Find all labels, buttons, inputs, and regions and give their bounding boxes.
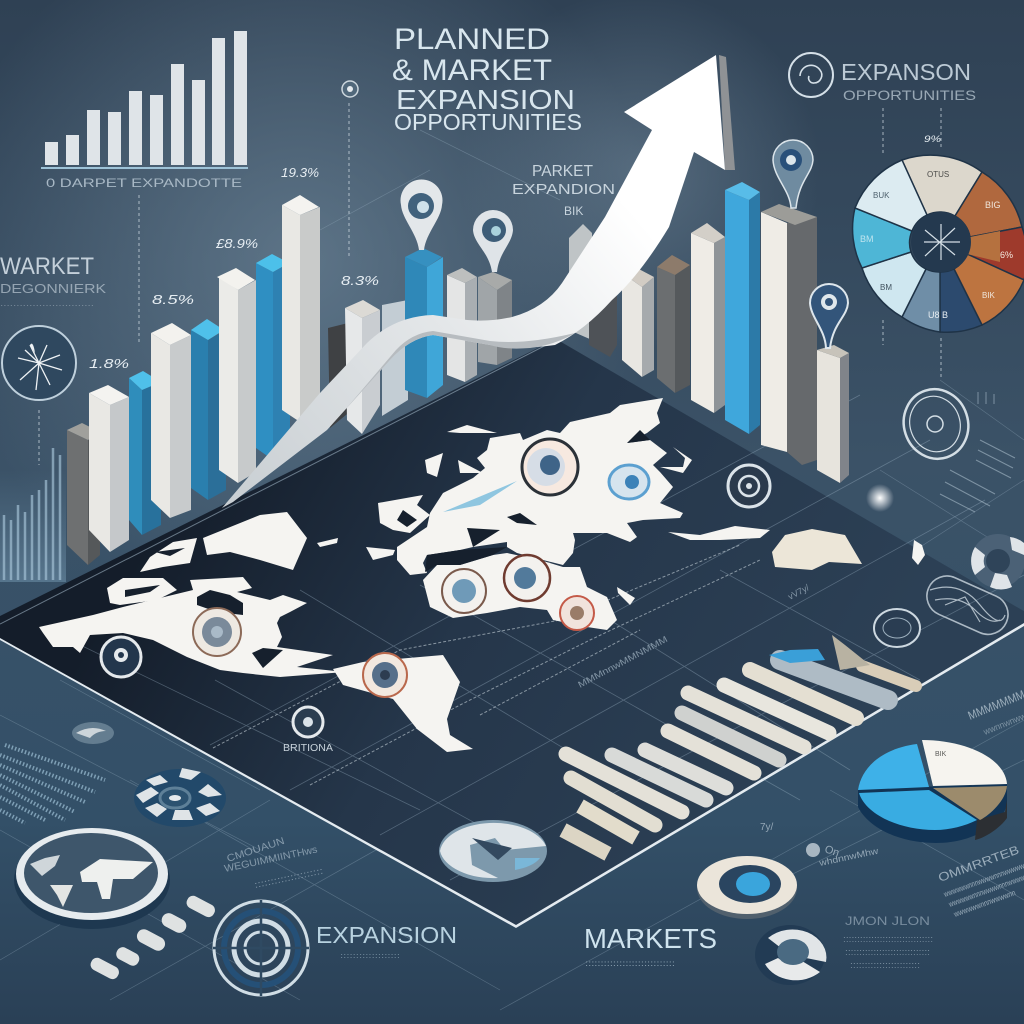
marker: pacific [101,637,141,677]
bar: white short [817,345,849,483]
percentage labels: 8.5% [152,292,194,307]
icon: right concentric rings [895,381,977,467]
bar: blue center [405,248,443,398]
bar: blue 1 [129,371,161,535]
island: british [458,460,483,473]
island: scandinavia [425,453,443,477]
map seas and bays [125,430,650,668]
continent: arctic island north [140,538,197,572]
scribble block center left: CMOUAUN [226,836,286,865]
icon: spiral badge [789,53,833,97]
map board [0,339,1024,928]
label: market: WARKET [0,253,94,280]
scribble block bottom right: JMON JLON [845,914,930,928]
scribble block center left: ::::::::::::::::::::: [253,866,324,890]
label: parket expansion [512,163,615,218]
board compass icon [874,609,920,647]
top-right wheel chart: BM [860,234,874,244]
title: PLANNED [394,23,550,56]
small eye icon [72,722,114,744]
continent: arctic islands [107,578,177,605]
bar: white 2 [691,223,725,413]
right text scribble block lower: OMMRRTEB [936,843,1021,885]
label: parket expansion: PARKET [532,163,593,180]
bar: white center 2 [447,268,477,382]
center right scribble block [760,822,880,868]
top-right wheel chart: BIG [985,200,1001,210]
marker: asia blue [609,465,649,499]
pill row [88,894,217,981]
right 3D bar chart group [569,182,849,483]
continent: greenland [203,512,307,570]
3D pie chart [858,740,1007,843]
percentage labels: 8.3% [341,273,379,288]
open ring chart [755,925,826,985]
marker: north america [193,608,241,656]
continent: eurasia [397,398,683,575]
map markers [101,439,770,754]
island: madagascar [617,587,635,605]
title: OPPORTUNITIES [394,109,582,135]
bar: white 3 [217,268,256,483]
leader lines [39,103,941,465]
icon: target [213,900,309,996]
percentage labels: 1.8% [89,356,129,371]
board scribble labels: MMMnnwMMNMMM [576,634,669,690]
top-right wheel chart: BM [880,283,892,292]
title [392,23,582,135]
label: expansion opportunities: OPPORTUNITIES [843,87,976,103]
wheel segments [853,155,1024,332]
right side scribble panels [940,392,1015,512]
bar: white 1 [622,267,654,377]
right text scribble block lower [936,843,1024,919]
board badge [920,570,1014,641]
center right scribble block: whdnnwMhw [817,846,880,868]
marker: south america [363,653,407,697]
right text scribble block upper [966,687,1024,737]
label: markets: ::::::::::::::::::::::::::::: [585,959,675,968]
percentage labels: 19.3% [281,165,319,180]
label: expansion opportunities [841,59,976,103]
marker: japan spiral [728,465,770,507]
label: expansion opportunities: EXPANSON [841,59,971,85]
top-right wheel chart [853,155,1024,332]
continent: australia [772,529,862,570]
dotted data matrix [0,745,105,823]
world map [39,398,925,752]
board gauge [439,820,547,882]
bar: white faint center [382,300,408,416]
left 3D bar chart group [67,195,320,565]
label: parket expansion: BIK [564,204,583,218]
label: markets [584,923,717,968]
bar: white and dark [761,204,817,465]
top-right wheel chart: U8 B [928,310,948,320]
label: expansion: EXPANSION [316,922,457,948]
bar: blue tall [725,182,760,434]
bar: dark center [328,322,352,428]
scribble block bottom right [843,914,933,970]
center right scribble block: On [823,843,841,859]
continent: iberia [378,495,430,533]
left pulse chart [0,448,66,582]
bar: blue 3 [256,254,290,460]
top-right wheel chart: 6% [1000,250,1013,260]
scribble block bottom right: :::::::::::::::::::::::: [850,960,920,970]
3D pie chart: BIK [935,751,947,758]
board horizontal bar chart [563,635,916,854]
continent: africa [423,553,617,630]
donut: right edge [971,534,1024,589]
bar: gray center [478,272,512,365]
label: expansion [316,922,457,960]
label: expansion: ::::::::::::::::::: [340,953,400,960]
growth arrow [222,55,735,508]
scribble block bottom right: :::::::::::::::::::::::::::::::: [843,934,933,944]
label: market: ............................. [0,299,94,308]
island: japan hook [660,447,692,473]
label: market [0,253,106,308]
bar: brown gray [657,255,690,393]
continent: south america [333,655,473,752]
marker: africa west [442,569,486,613]
chip donut [134,768,226,827]
percentage labels [89,134,941,371]
scribble block bottom right: :::::::::::::::::::::::::::::: [845,947,930,957]
top-right wheel chart: BIK [982,291,996,300]
title: & MARKET [392,54,552,87]
island: new zealand [912,540,925,565]
island: indonesia [668,526,770,540]
marker: south africa [560,596,594,630]
sparkle [866,484,894,512]
center 3D bar chart group [328,248,512,434]
top-left bar chart: 0 DARPET EXPANDOTTE [46,176,242,190]
scribble block center left: WEGUIMMIINTHws [223,844,319,875]
percentage labels: 9% [924,134,941,144]
icon: left radial badge [2,326,76,400]
bar: white 1 [89,385,129,552]
top-right wheel chart: BUK [873,191,890,200]
title: EXPANSION [396,84,575,115]
label: markets: MARKETS [584,923,717,954]
board scribble labels: vV7y/ [786,582,811,602]
eurasia blue river [443,481,517,512]
center right scribble block: 7y/ [760,822,774,833]
marker: ocean with label [283,707,333,754]
globe badge [14,828,170,929]
bar: blue 2 [191,319,226,500]
scribble block center left [223,836,324,890]
pin: right short [810,284,848,348]
island: arctic sliver [447,425,497,433]
bar: white center 1 [345,300,380,434]
icon: small top pin [342,81,358,97]
board scribble labels [576,582,811,690]
map pins on bars [400,140,848,348]
bar: gray 1 [67,423,100,565]
continent: iceland [317,538,338,547]
pin: right tall [773,140,813,208]
percentage labels: £8.9% [215,236,258,251]
pin: center left [400,179,442,250]
continent: north america [39,577,345,677]
label: parket expansion: EXPANDION [512,181,615,198]
donut with blue center [697,856,797,919]
island: west fragment [366,547,395,560]
bar: faint back white [569,224,592,340]
bar: white 4 [282,195,320,422]
marker: russia [522,439,578,495]
bar: dark back [589,290,617,357]
marker: ocean with label: BRITIONA [283,743,333,754]
marker: africa east [504,555,550,601]
bar: white 2 [151,323,191,518]
top-left bar chart [41,31,248,190]
top-right wheel chart: OTUS [927,170,949,179]
pin: center right [473,210,513,272]
label: market: DEGONNIERK [0,281,106,296]
